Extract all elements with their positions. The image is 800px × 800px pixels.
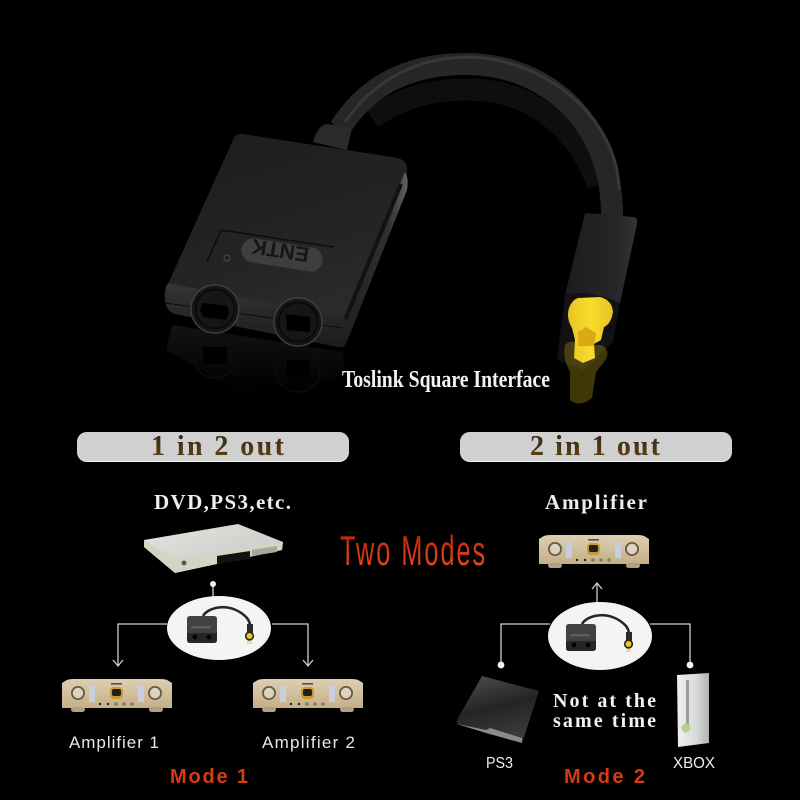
splitter ellipse mode 1 [167, 596, 271, 660]
right socket [274, 298, 322, 346]
adapter top face [168, 134, 407, 330]
icon: amplifier 1 [62, 679, 172, 712]
reflection of adapter [166, 325, 345, 394]
label: Amplifier 2: Amplifier 2 [262, 733, 355, 752]
icon: PS3 [457, 676, 539, 743]
icon: DVD player [144, 524, 283, 573]
cable [340, 57, 619, 215]
icon: Xbox [677, 673, 709, 747]
caption: Toslink Square Interface: Toslink Square Interface [342, 367, 550, 393]
note: Not at the same time [553, 690, 656, 732]
left socket [191, 285, 239, 333]
cable reflection [372, 90, 598, 185]
logo plate [207, 230, 334, 273]
yellow toslink tip [568, 297, 613, 363]
pill: 1 in 2 out: 1 in 2 out [151, 431, 285, 462]
heading: Two Modes: Two Modes [340, 529, 487, 575]
pill: 2 in 1 out: 2 in 1 out [530, 431, 661, 462]
label: Amplifier top: Amplifier [545, 490, 647, 514]
label: XBOX: XBOX [673, 755, 715, 772]
plug connector [557, 205, 637, 370]
icon: amplifier top [539, 535, 649, 568]
adapter front face [165, 283, 348, 347]
note: Not at the same time: same time [553, 710, 656, 732]
cable neck [313, 124, 352, 150]
product photo: fibre optic splitter [165, 57, 637, 404]
icon: amplifier 2 [253, 679, 363, 712]
label: Mode 1: Mode 1 [170, 766, 248, 788]
pill: 1 in 2 out [77, 431, 349, 462]
label: PS3: PS3 [486, 755, 513, 772]
logo plate: ENTK [250, 234, 311, 266]
adapter side edge [343, 172, 408, 345]
connector lines mode 1 [113, 581, 313, 666]
label: Mode 2: Mode 2 [564, 766, 645, 788]
note: Not at the same time: Not at the [553, 690, 656, 712]
plug reflection [564, 342, 608, 404]
pill: 2 in 1 out [460, 431, 732, 462]
label: DVD, PS3, etc.: DVD,PS3,etc. [154, 490, 291, 514]
connector lines mode 2 [498, 583, 693, 668]
splitter ellipse mode 2 [548, 602, 652, 670]
label: Amplifier 1: Amplifier 1 [69, 733, 159, 752]
